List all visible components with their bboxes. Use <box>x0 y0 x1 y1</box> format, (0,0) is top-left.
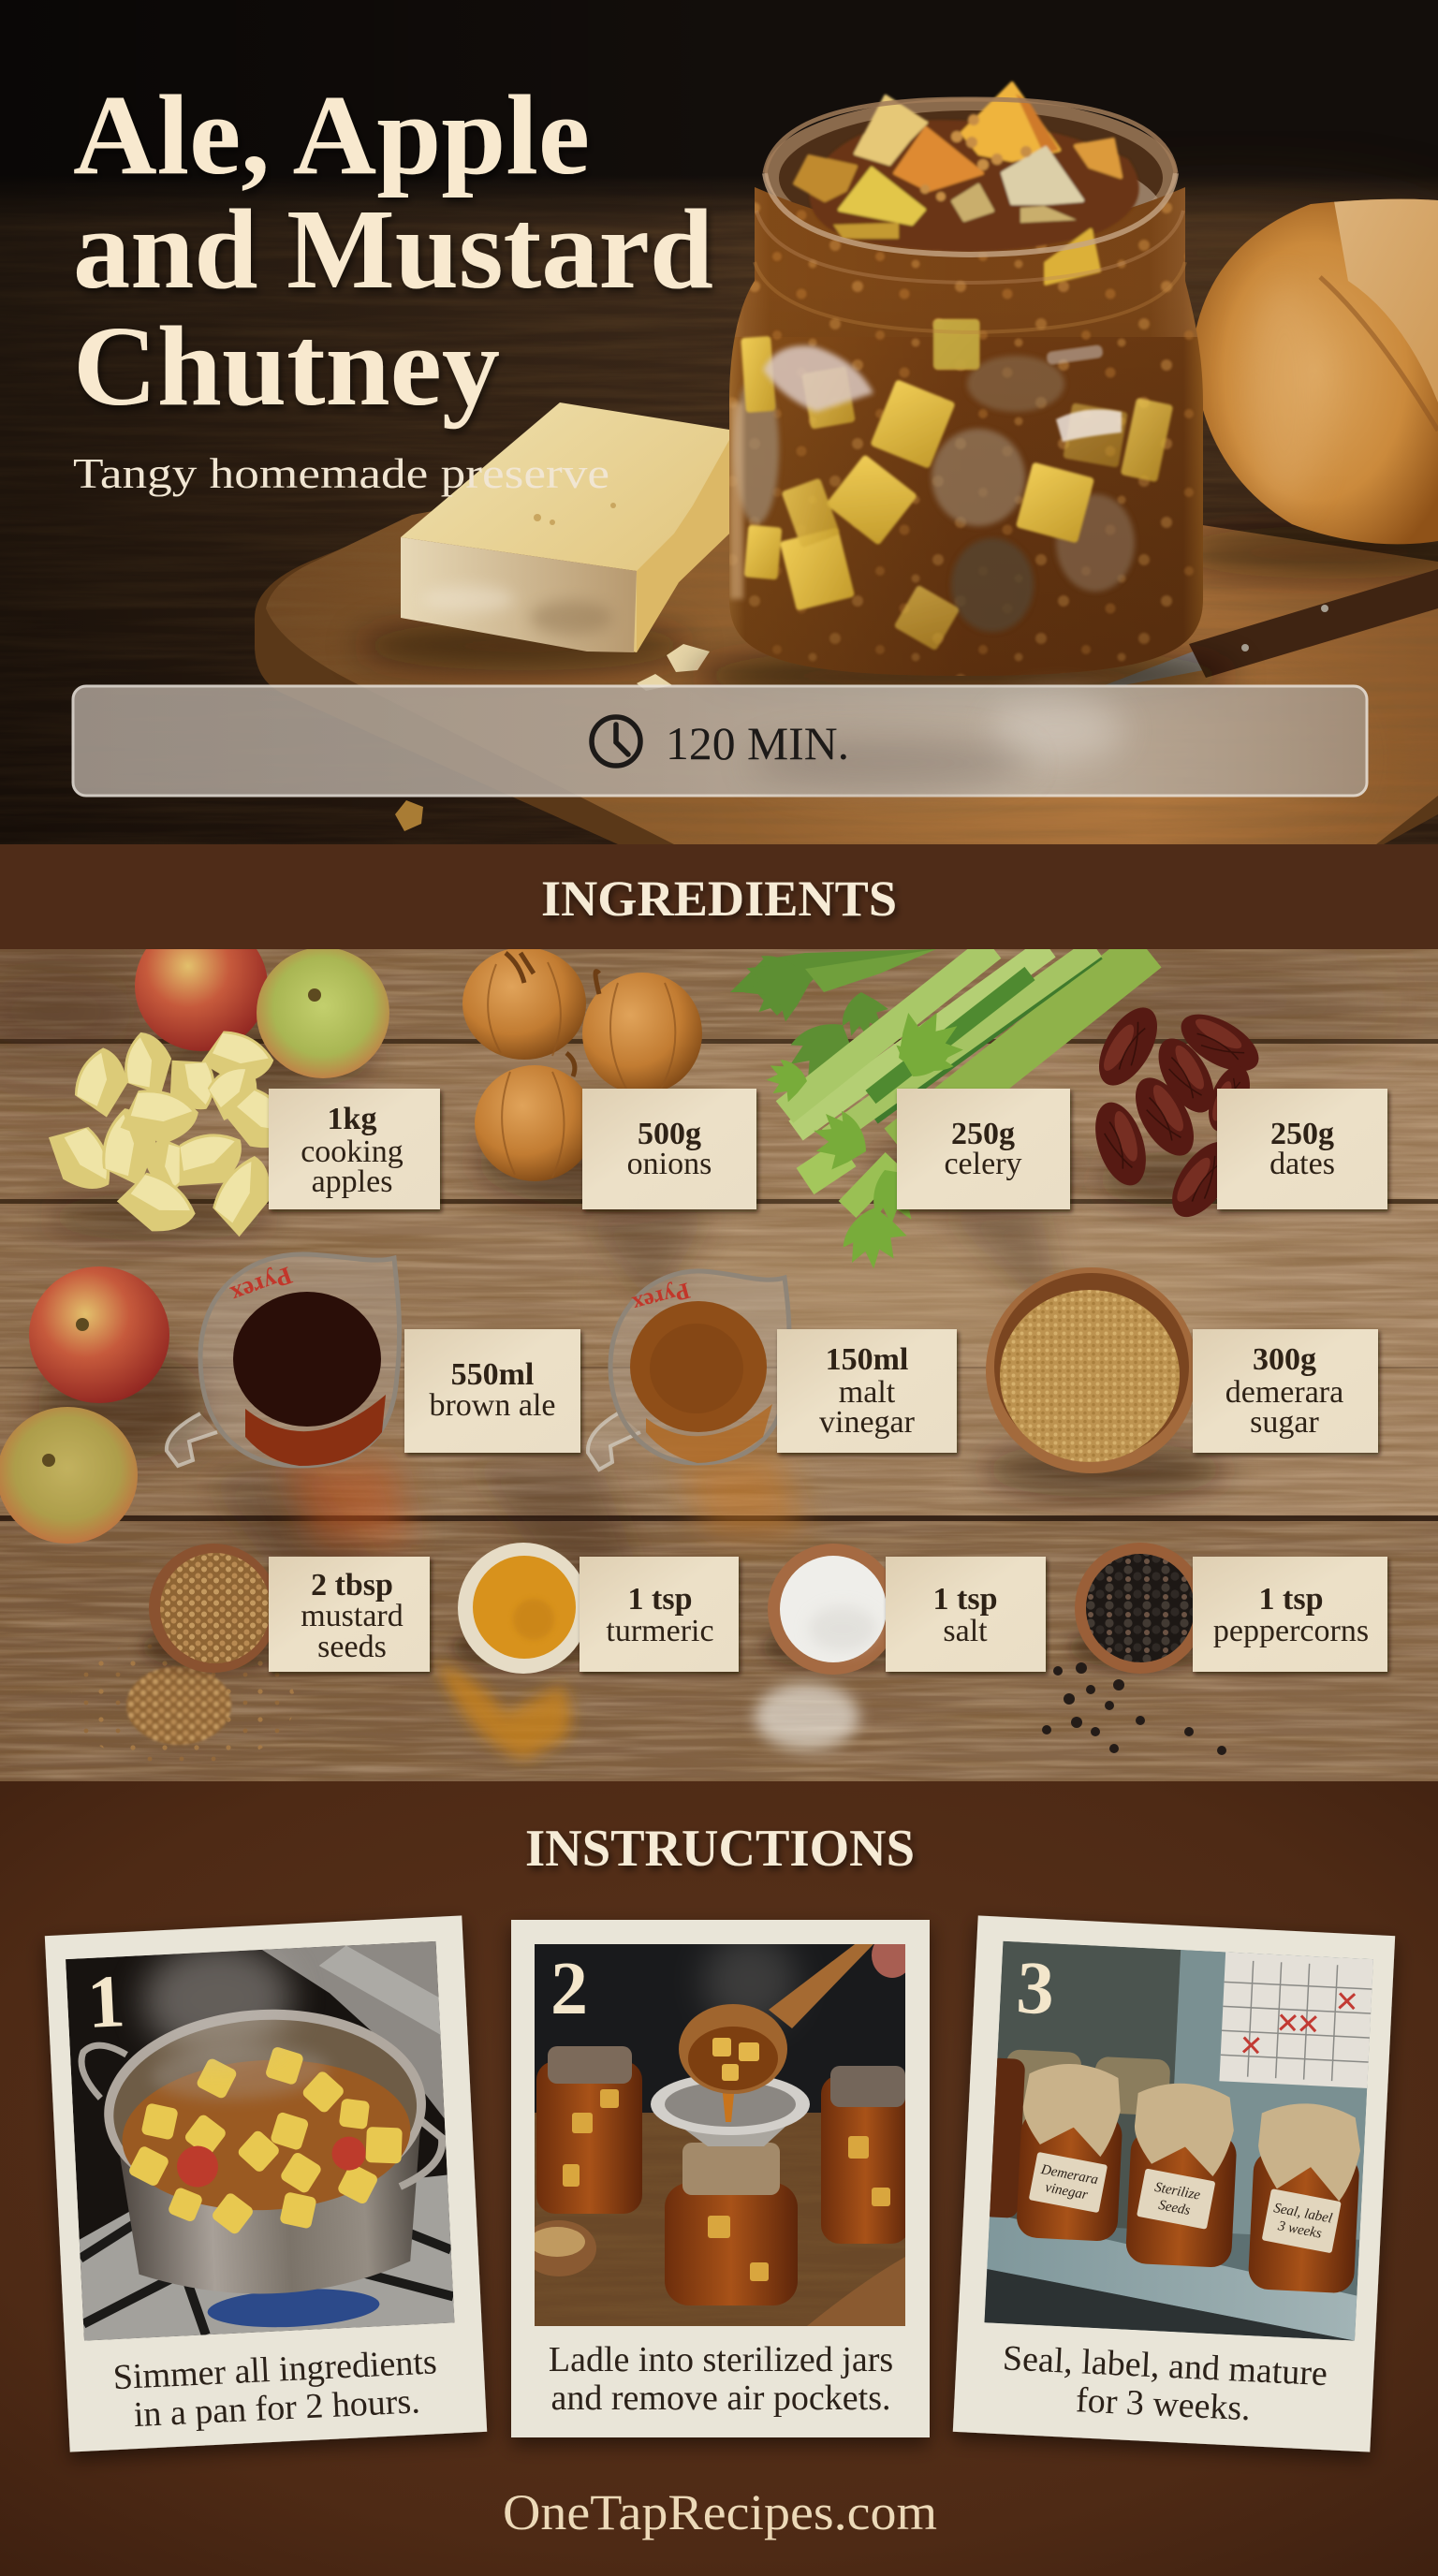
ingredients heading: INGREDIENTS <box>541 871 897 927</box>
card: 1 tsp turmeric: turmeric <box>606 1614 714 1648</box>
knife <box>1105 569 1438 685</box>
card: 1kg cooking apples: 1kg <box>328 1102 376 1136</box>
top row: celery <box>730 947 1147 1273</box>
card: 500g onions <box>582 1089 756 1209</box>
jar B: Seeds <box>1157 2198 1192 2218</box>
jar A: Demerara <box>1039 2162 1099 2188</box>
title: Ale, Apple <box>73 72 590 198</box>
top chutney pieces <box>795 83 1139 369</box>
card: 2 tbsp mustard seeds <box>269 1557 430 1672</box>
middle row: apples <box>0 1266 206 1544</box>
card: 500g onions: 500g <box>638 1117 701 1151</box>
bottom row: peppercorn bowl and spill <box>1042 1543 1226 1755</box>
jar C <box>1248 2101 1362 2293</box>
step 2 caption <box>549 2340 893 2418</box>
step 1 photo: simmering pot <box>66 1932 454 2341</box>
instructions panel <box>0 1781 1438 2576</box>
jar back rim and inner glass <box>765 98 1177 251</box>
step 2 caption: and remove air pockets. <box>551 2378 890 2418</box>
card: 150ml malt vinegar: vinegar <box>819 1405 916 1440</box>
middle row: measuring cup of ale <box>167 1254 412 1544</box>
calendar <box>1219 1952 1375 2088</box>
hero section <box>0 0 1438 847</box>
step 1 number: 1 <box>85 1960 126 2044</box>
card: 300g demerara sugar: 300g <box>1253 1342 1316 1377</box>
middle row: sugar bowl <box>983 1267 1226 1498</box>
middle row: measuring cup of vinegar <box>588 1271 805 1535</box>
card: 1 tsp peppercorns: 1 tsp <box>1259 1582 1323 1617</box>
bottom row: salt bowl and spill <box>755 1544 904 1750</box>
step 3 caption: Seal, label, and mature <box>1002 2338 1328 2393</box>
card: 550ml brown ale: 550ml <box>451 1357 534 1392</box>
jar C: Seal, label <box>1272 2201 1333 2227</box>
chutney jar <box>693 83 1236 704</box>
card: 150ml malt vinegar: malt <box>839 1375 896 1410</box>
card: 1 tsp peppercorns <box>1193 1557 1387 1672</box>
step 2 number: 2 <box>550 1948 588 2030</box>
step 1 caption: Simmer all ingredients <box>112 2342 438 2397</box>
step 2 caption: Ladle into sterilized jars <box>549 2340 893 2379</box>
card: 1 tsp turmeric <box>580 1557 739 1672</box>
step 3 caption: for 3 weeks. <box>1075 2380 1252 2428</box>
step 3 card <box>953 1915 1395 2452</box>
step 3 photo: jars on shelf <box>976 1940 1375 2341</box>
card: 1 tsp turmeric: 1 tsp <box>628 1582 692 1617</box>
title: and Mustard <box>73 186 713 313</box>
card: 300g demerara sugar: sugar <box>1250 1405 1319 1440</box>
middle row: measuring cup of vinegar: Pyrex <box>629 1277 693 1317</box>
card: 1 tsp peppercorns: peppercorns <box>1213 1614 1369 1648</box>
step 2 card <box>511 1920 930 2437</box>
card: 250g dates: dates <box>1269 1147 1335 1181</box>
step 1 caption <box>112 2342 440 2436</box>
cheese wedge <box>356 402 729 831</box>
time bar <box>73 686 1367 796</box>
title: Chutney <box>73 303 500 430</box>
celery leaves top <box>730 949 936 1101</box>
card: 1 tsp salt: salt <box>943 1614 988 1648</box>
time text: 120 MIN. <box>666 717 849 769</box>
instructions heading: INSTRUCTIONS <box>525 1820 915 1878</box>
top row: onions <box>462 947 721 1208</box>
jar body <box>721 178 1208 683</box>
step 3 caption <box>1000 2338 1328 2432</box>
apple chunks in jar <box>741 319 1173 651</box>
card: 1kg cooking apples <box>269 1089 440 1209</box>
ingredients header band <box>0 844 1438 950</box>
card: 1 tsp salt: 1 tsp <box>933 1582 997 1617</box>
bottom row: mustard bowl and spill <box>70 1544 295 1767</box>
jar B: Sterilize <box>1153 2180 1202 2203</box>
footer website: OneTapRecipes.com <box>503 2484 937 2540</box>
title <box>73 72 713 430</box>
jar B <box>1125 2081 1240 2268</box>
jar rim front and threads <box>755 99 1185 332</box>
ingredients panel <box>0 920 1438 1782</box>
card: 1 tsp salt <box>886 1557 1046 1672</box>
card: 1kg cooking apples: cooking <box>301 1134 404 1169</box>
card: 2 tbsp mustard seeds: 2 tbsp <box>311 1568 393 1603</box>
card: 250g celery: celery <box>944 1147 1022 1181</box>
bottom row: turmeric bowl and spill <box>436 1543 594 1760</box>
step 2 photo: ladling into jars <box>521 1933 913 2326</box>
jar A: vinegar <box>1044 2180 1089 2203</box>
cutting board <box>255 511 1438 844</box>
step 1 card <box>45 1915 487 2452</box>
top row: dates <box>1086 998 1268 1227</box>
icon: clock <box>592 717 640 766</box>
card: 150ml malt vinegar: 150ml <box>826 1342 908 1377</box>
translucent onion pieces <box>734 356 1135 632</box>
subtitle: Tangy homemade preserve <box>73 449 609 497</box>
jar A <box>1016 2062 1125 2242</box>
jar C: 3 weeks <box>1276 2218 1323 2242</box>
card: 550ml brown ale: brown ale <box>429 1388 556 1423</box>
glass highlights <box>730 344 1122 599</box>
card: 1kg cooking apples: apples <box>312 1164 392 1199</box>
card: 300g demerara sugar <box>1193 1329 1378 1453</box>
bread loaf <box>1170 192 1438 578</box>
card: 300g demerara sugar: demerara <box>1225 1375 1343 1410</box>
top row: apples <box>41 920 389 1246</box>
card: 150ml malt vinegar <box>777 1329 957 1453</box>
card: 250g celery: 250g <box>951 1117 1015 1151</box>
card: 250g celery <box>897 1089 1070 1209</box>
step 1 caption: in a pan for 2 hours. <box>133 2381 421 2435</box>
card: 250g dates: 250g <box>1270 1117 1334 1151</box>
celery leaves lower <box>763 999 970 1273</box>
middle row: measuring cup of ale: Pyrex <box>227 1261 296 1310</box>
card: 550ml brown ale <box>404 1329 580 1453</box>
card: 2 tbsp mustard seeds: mustard <box>301 1599 404 1633</box>
card: 250g dates <box>1217 1089 1387 1209</box>
card: 2 tbsp mustard seeds: seeds <box>317 1630 387 1664</box>
step 3 number: 3 <box>1015 1947 1056 2030</box>
card: 500g onions: onions <box>627 1147 712 1181</box>
celery stalks <box>785 947 1147 1209</box>
